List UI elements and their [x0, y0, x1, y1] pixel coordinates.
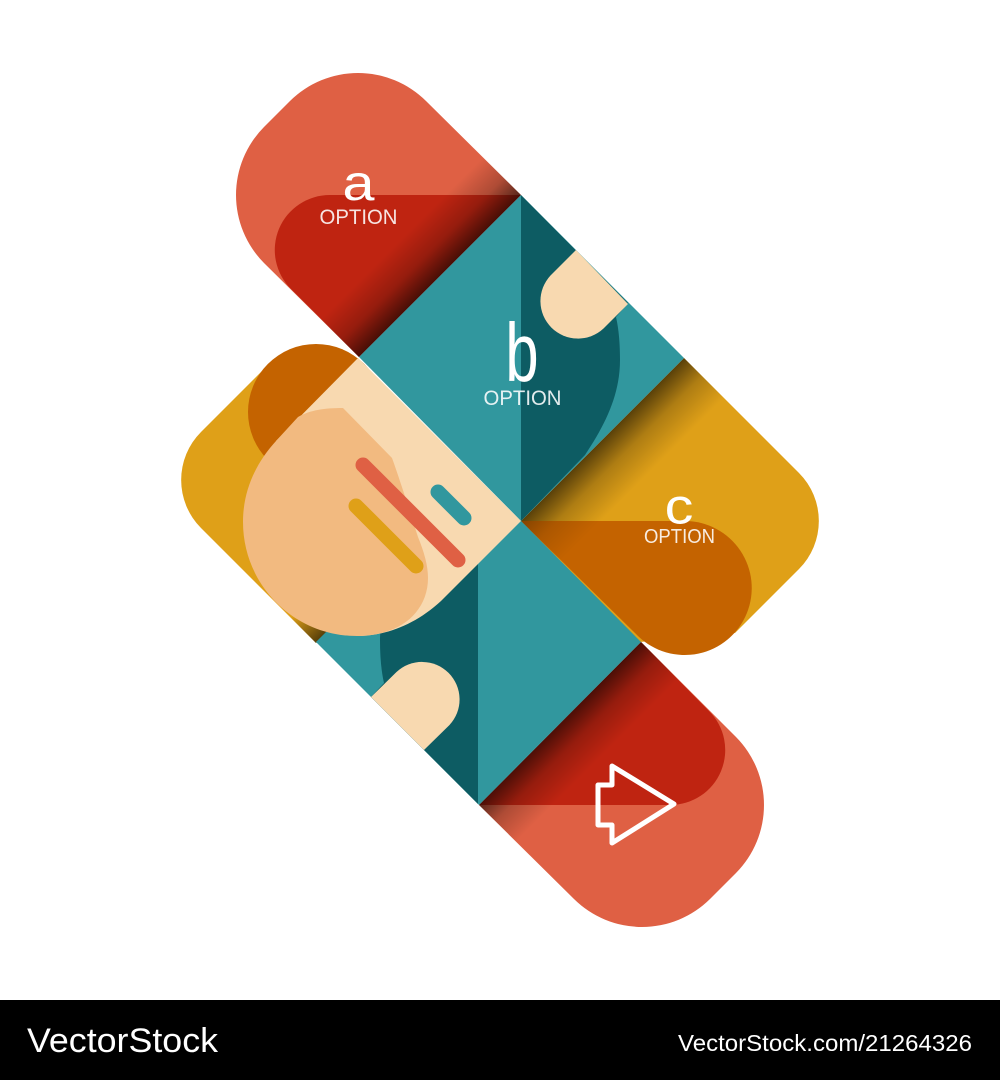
panel: lower teal diamond	[316, 480, 641, 805]
panel: beige menu card	[243, 358, 521, 636]
blob: peach overlay	[243, 408, 428, 636]
panel: option c gold tab	[515, 350, 825, 660]
bar: teal line	[438, 492, 464, 518]
pill: lower beige tab	[371, 662, 460, 750]
label: option c: c	[665, 479, 693, 535]
panel: left gold tab	[181, 344, 369, 643]
panel: arrow red tab	[470, 635, 770, 930]
label: option a: OPTION	[320, 206, 398, 229]
watermark bar	[0, 1000, 1000, 1080]
icon: outlined arrow	[598, 766, 674, 843]
label: option b: OPTION	[484, 387, 562, 410]
label: option c	[644, 479, 715, 548]
bar: gold line	[356, 506, 416, 566]
label: option a: a	[343, 155, 375, 211]
panel: option b teal diamond	[359, 195, 684, 521]
label: option b: b	[505, 308, 539, 399]
bar: red line	[363, 465, 458, 560]
panel: option a red tab	[230, 70, 530, 360]
watermark url: VectorStock.com/21264326	[678, 1030, 972, 1056]
label: option b	[484, 308, 562, 410]
watermark brand: VectorStock	[27, 1022, 219, 1060]
label: option c: OPTION	[644, 526, 715, 548]
label: option a	[320, 155, 398, 229]
pill: upper beige tab	[540, 250, 628, 339]
